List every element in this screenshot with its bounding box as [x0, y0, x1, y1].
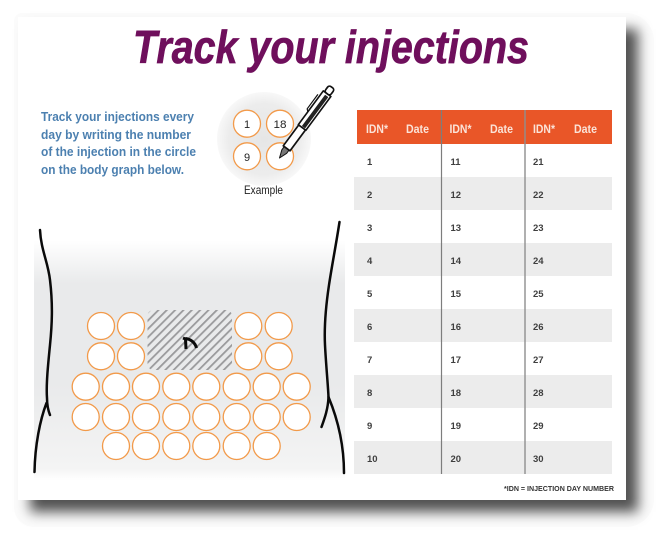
row numbers: 5 — [367, 289, 373, 300]
row numbers: 2 — [367, 190, 372, 201]
injection site circles — [72, 312, 310, 460]
example diagram — [217, 83, 336, 197]
row numbers: 19 — [450, 421, 461, 432]
instructions text block: Track your injections every — [41, 110, 194, 124]
row numbers: 24 — [533, 256, 544, 267]
row numbers — [367, 157, 544, 465]
row numbers: 22 — [533, 190, 544, 201]
instructions text block: day by writing the number — [41, 128, 191, 142]
row numbers: 3 — [367, 223, 372, 234]
row numbers: 10 — [367, 454, 378, 465]
torso shading — [34, 240, 345, 480]
instructions text block — [41, 110, 196, 177]
table header: Date — [490, 122, 513, 136]
example circles with handwritten numbers: 18 — [274, 119, 286, 131]
row numbers: 16 — [450, 322, 461, 333]
body graph — [34, 222, 345, 480]
row numbers: 1 — [367, 157, 373, 168]
row numbers: 6 — [367, 322, 372, 333]
row numbers: 26 — [533, 322, 544, 333]
row numbers: 7 — [367, 355, 372, 366]
row numbers: 29 — [533, 421, 544, 432]
row numbers: 11 — [450, 157, 461, 168]
tracking table — [354, 110, 612, 474]
right body outline — [322, 222, 344, 473]
table header: Date — [574, 122, 597, 136]
example circles with handwritten numbers — [234, 110, 294, 170]
row numbers: 12 — [450, 190, 461, 201]
row numbers: 23 — [533, 223, 544, 234]
navel exclusion hatch — [148, 310, 232, 370]
example caption: Example — [244, 183, 283, 197]
table header: IDN* — [450, 122, 472, 136]
alternating row shading — [354, 177, 612, 474]
row numbers: 15 — [450, 289, 462, 300]
icon: pen — [274, 83, 336, 161]
row numbers: 17 — [450, 355, 461, 366]
row numbers: 20 — [450, 454, 461, 465]
row numbers: 18 — [450, 388, 461, 399]
row numbers: 28 — [533, 388, 544, 399]
row numbers: 8 — [367, 388, 372, 399]
row numbers: 25 — [533, 289, 544, 300]
instructions text block: on the body graph below. — [41, 163, 184, 177]
row numbers: 30 — [533, 454, 544, 465]
left body outline — [34, 230, 52, 472]
table header: Date — [406, 122, 429, 136]
row numbers: 13 — [450, 223, 461, 234]
example circles with handwritten numbers: 1 — [244, 119, 250, 131]
row numbers: 21 — [533, 157, 544, 168]
footnote: *IDN = INJECTION DAY NUMBER — [504, 486, 614, 493]
table header: IDN* — [533, 122, 555, 136]
example circles with handwritten numbers: 9 — [244, 152, 250, 164]
title: Track your injections — [133, 21, 529, 73]
row numbers: 9 — [367, 421, 372, 432]
icon: navel mark — [183, 338, 196, 349]
table header: IDN* — [366, 122, 388, 136]
instructions text block: of the injection in the circle — [41, 145, 196, 159]
row numbers: 27 — [533, 355, 544, 366]
row numbers: 14 — [450, 256, 462, 267]
row numbers: 4 — [367, 256, 373, 267]
table header — [357, 110, 612, 144]
